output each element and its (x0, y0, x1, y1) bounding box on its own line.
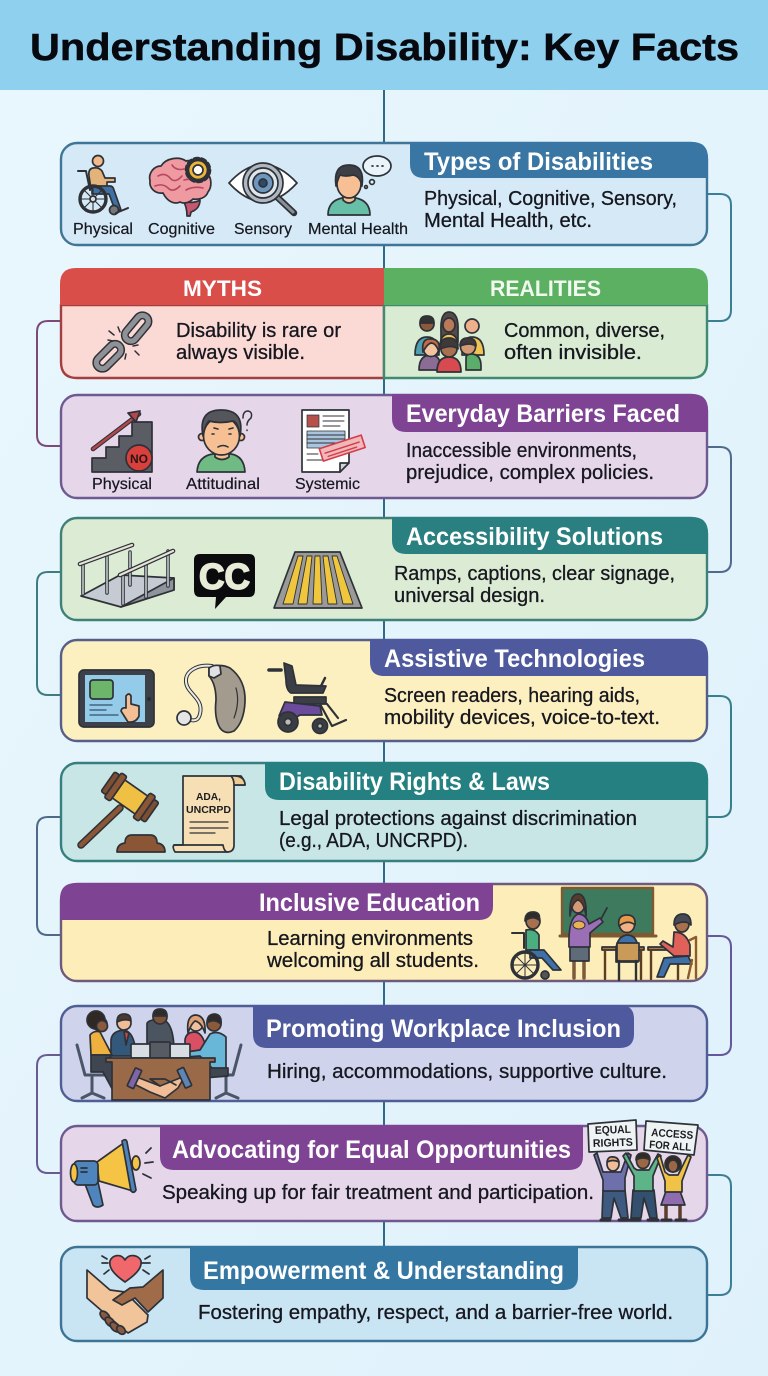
connector: myths to barriers (37, 321, 60, 446)
title banner (0, 0, 768, 90)
icon: legal scroll: UNCRPD (186, 804, 231, 816)
sign: access for all (644, 1121, 698, 1155)
heading: Disability Rights & Laws (279, 768, 550, 796)
description: Physical, Cognitive, Sensory, (424, 188, 677, 210)
icon labels: Physical (73, 221, 133, 238)
panel: types of disabilities (61, 142, 708, 245)
icon: stairs with no sign (92, 411, 152, 472)
icon labels: Cognitive (148, 221, 215, 238)
panel: myths: always visible. (176, 342, 305, 364)
description: Legal protections against discrimination (279, 808, 637, 830)
icon: tactile paving (274, 552, 362, 608)
heading: Types of Disabilities (424, 148, 653, 176)
connector: solutions to technologies (37, 572, 60, 695)
panel: accessibility solutions: universal design. (394, 585, 545, 607)
heading tab (253, 1005, 634, 1048)
sign: access for all: FOR ALL (649, 1139, 692, 1154)
panel: types of disabilities: Mental Health, etc. (424, 210, 592, 232)
heading tab (392, 394, 708, 432)
heading tab (190, 1246, 578, 1290)
icon labels: Mental Health (308, 221, 408, 238)
icon: tablet (79, 670, 154, 727)
sign: equal rights: EQUAL (595, 1124, 631, 1137)
description: Fostering empathy, respect, and a barrier-free world. (198, 1302, 673, 1324)
icon: eye with magnifier (229, 163, 297, 213)
icon: gavel (81, 769, 165, 852)
description: Ramps, captions, clear signage, (394, 563, 675, 585)
icon: ramp with handrails (80, 545, 174, 607)
description: Hiring, accommodations, supportive culture. (267, 1061, 667, 1083)
connector: barriers to solutions (708, 447, 731, 572)
illustration: people holding signs (588, 1120, 698, 1220)
heading: Advocating for Equal Opportunities (172, 1136, 571, 1164)
realities header (384, 268, 708, 305)
panel: disability rights and laws: (e.g., ADA, UNCRPD). (279, 830, 468, 852)
icon labels: Attitudinal (186, 476, 260, 493)
description: Inaccessible environments, (406, 440, 637, 462)
heading tab (265, 762, 708, 800)
icon: megaphone (70, 1140, 153, 1207)
central timeline line (383, 90, 385, 1246)
heading band (60, 883, 493, 920)
panel: everyday barriers: prejudice, complex policies. (406, 462, 654, 484)
icon: mental health person (328, 156, 391, 215)
icon: power wheelchair (269, 663, 346, 734)
student and desk (602, 915, 644, 980)
icon: broken chain (94, 313, 151, 371)
description: Screen readers, hearing aids, (384, 685, 640, 707)
connector: types to realities (708, 194, 731, 321)
icon: diverse group of people (415, 312, 484, 372)
panel: empowerment and understanding (61, 1246, 707, 1341)
panel: realities: often invisible. (504, 342, 642, 364)
heading: Promoting Workplace Inclusion (266, 1015, 621, 1043)
connector: workplace to advocating (37, 1055, 60, 1173)
wheelchair student figure (512, 912, 561, 979)
panel: assistive technologies: mobility devices, voice-to-text. (384, 707, 660, 729)
icon labels (73, 221, 408, 238)
sign: access for all: ACCESS (651, 1127, 694, 1142)
title: Understanding Disability: Key Facts (30, 27, 739, 69)
heading: Inclusive Education (259, 889, 480, 917)
connector: rights to education (37, 817, 60, 935)
myths header (60, 268, 384, 305)
description: Common, diverse, (504, 320, 665, 342)
heading: Assistive Technologies (384, 645, 645, 673)
illustration: team meeting with handshake (77, 1009, 241, 1100)
illustration: inclusive classroom (512, 888, 696, 980)
heading tab (392, 517, 708, 554)
person in yellow sweater (657, 1155, 691, 1220)
icon: closed captions (194, 554, 255, 609)
heading tab (410, 142, 708, 178)
icon: confused person (197, 410, 252, 472)
icon: hearing aid (177, 665, 245, 732)
heading: Accessibility Solutions (406, 523, 663, 551)
icon: legal scroll (173, 776, 245, 852)
heading: REALITIES (490, 276, 601, 301)
description: Speaking up for fair treatment and participation. (162, 1182, 594, 1204)
heading: Everyday Barriers Faced (406, 400, 680, 428)
connector: technologies to rights (708, 696, 731, 817)
heading: Empowerment & Understanding (203, 1257, 564, 1285)
icon labels (92, 476, 360, 493)
panel: accessibility solutions (61, 517, 708, 620)
icon labels: Physical (92, 476, 152, 493)
heading: MYTHS (183, 276, 262, 301)
icon: stairs with no sign: NO (130, 452, 148, 466)
panel: workplace inclusion (61, 1005, 707, 1101)
icon: rejected document (302, 410, 365, 472)
panel: realities (384, 268, 708, 378)
icon: brain and gear (150, 158, 211, 216)
icon: wheelchair (78, 156, 128, 214)
heading tab (160, 1125, 583, 1170)
icon labels: Systemic (295, 476, 360, 493)
person in purple sweater (594, 1153, 631, 1220)
panel: disability rights and laws (61, 762, 708, 861)
person in green sweater (623, 1153, 661, 1220)
icon labels: Sensory (234, 221, 292, 238)
panel: myths (60, 268, 384, 378)
icon: legal scroll: ADA, (196, 791, 221, 803)
description: Disability is rare or (176, 320, 341, 342)
heading tab (370, 639, 708, 676)
teacher figure (569, 894, 607, 978)
sign: equal rights (588, 1120, 637, 1152)
sign: equal rights: RIGHTS (593, 1137, 633, 1150)
description: Learning environments (267, 928, 473, 950)
student with headset and desk (648, 914, 696, 979)
panel: inclusive education (60, 883, 707, 981)
icon: closed captions: CC (199, 556, 250, 597)
panel: advocating for equal opportunities (61, 1120, 707, 1221)
connector: advocating to empowerment (708, 1175, 731, 1295)
panel: everyday barriers (61, 394, 708, 498)
panel: assistive technologies (61, 639, 708, 741)
panel: inclusive education: welcoming all students. (266, 950, 479, 972)
connector: education to workplace (708, 936, 731, 1055)
icon: heart and handshake (87, 1256, 163, 1336)
